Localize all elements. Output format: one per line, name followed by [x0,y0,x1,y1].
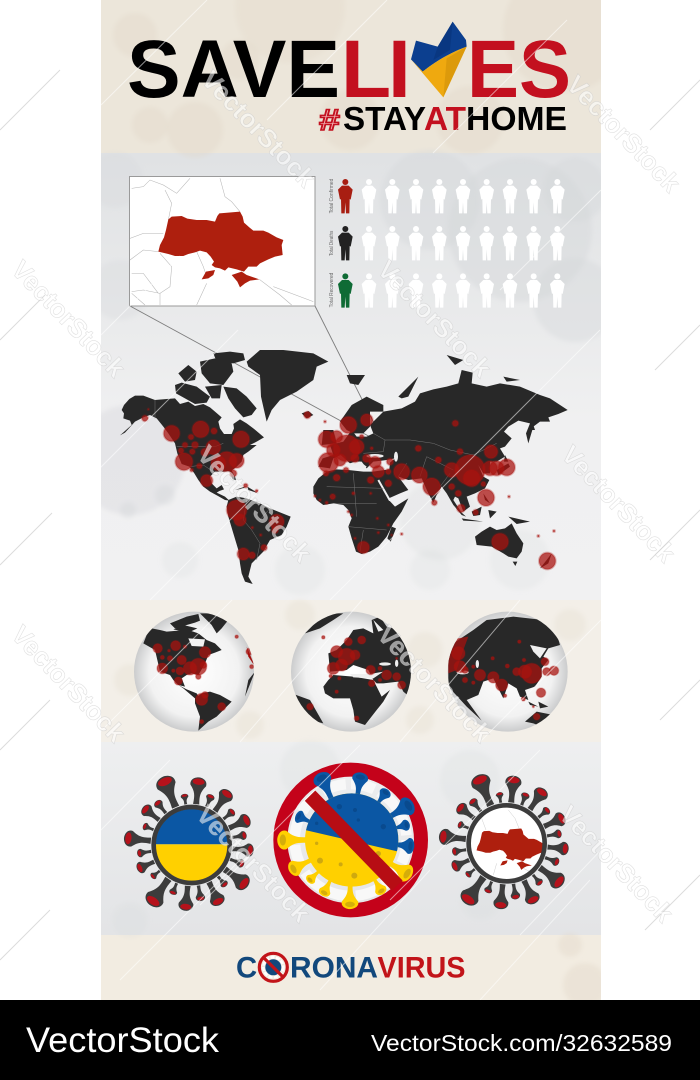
pictogram: total recovered row: Total Recovered [329,273,335,307]
background: ghost virus shapes [101,45,601,1000]
footer bar: VectorStock [26,1021,220,1060]
virus icon: Ukraine map [438,771,569,910]
heading: #STAYATHOME: STAY [343,101,426,138]
blue spikes [293,769,418,854]
footer logo: CORONAVIRUS: C [236,952,257,984]
country borders [155,400,497,560]
pictogram: total confirmed row: Total Confirmed [329,179,335,213]
no-virus sign with Ukraine colors [277,769,421,910]
title: SAVE LIVES: L [341,24,391,115]
map land masses [120,350,568,584]
watermark diagonal lines [100,0,601,1000]
heading: #STAYATHOME [319,101,567,138]
connector lines from inset to map [130,306,385,445]
footer bar [0,1000,700,1080]
Ukraine shape on inset [158,212,283,287]
pictogram: total deaths row [329,226,565,260]
globe: Americas [134,612,255,732]
inland seas [340,452,398,501]
footer bar: VectorStock.com/32632589 [371,1030,672,1056]
icon: Ukraine flag heart [411,22,467,97]
icon: mini no-virus sign [259,953,287,981]
heading: #STAYATHOME: # [319,104,340,137]
title: SAVE LIVES [127,24,571,115]
watermark text [6,64,687,928]
pictogram: total confirmed row [329,179,565,213]
pictogram: total deaths row: Total Deaths [329,230,335,256]
heading: #STAYATHOME: AT [424,101,467,138]
world map [120,350,568,584]
footer logo: CORONAVIRUS: RONA [290,952,378,984]
footer logo: CORONAVIRUS: VIRUS [378,952,466,984]
inset map of Ukraine [130,176,315,306]
title: SAVE LIVES: I [388,24,411,115]
title: SAVE LIVES: SAVE [127,24,340,115]
heading: #STAYATHOME: HOME [466,101,567,138]
footer logo: CORONAVIRUS [236,952,466,984]
virus icon: Ukraine flag [123,773,254,912]
case clusters [142,409,556,569]
globe: Asia [448,612,568,732]
globe: Europe and Africa [291,612,413,732]
title: SAVE LIVES: ES [467,24,571,115]
yellow spikes [277,830,416,909]
pictogram: total recovered row [329,273,565,308]
